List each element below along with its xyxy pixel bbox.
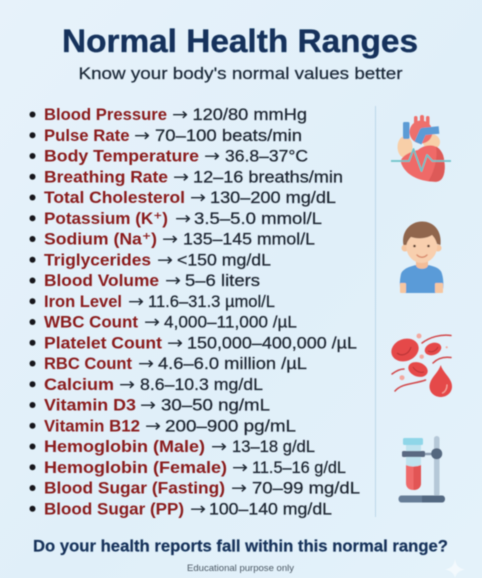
row: triglycerides: Triglycerides <box>44 250 151 269</box>
row: hemoglobin male <box>30 437 315 457</box>
row: hemoglobin male: → <box>211 437 227 457</box>
row: sodium: → <box>162 230 178 250</box>
row: vitamin b12: Vitamin B12 <box>44 416 140 435</box>
row: body temperature: 36.8–37°C <box>225 146 308 166</box>
row: blood sugar pp: → <box>190 499 206 519</box>
row: total cholesterol: 130–200 mg/dL <box>210 188 336 207</box>
row: platelet count <box>30 333 357 353</box>
row: triglycerides <box>30 250 271 270</box>
row: potassium <box>30 209 322 229</box>
row: sodium: Sodium (Na⁺) <box>44 230 157 248</box>
row: vitamin d3: 30–50 ng/mL <box>161 396 270 414</box>
row: breathing rate: 12–16 breaths/min <box>193 167 343 186</box>
row: blood sugar fasting: Blood Sugar (Fasting) <box>44 478 225 498</box>
icon: boy <box>400 222 443 293</box>
closing question: Do your health reports fall within this normal range? <box>33 538 448 556</box>
sparkle <box>445 559 465 578</box>
row: potassium: → <box>175 209 191 229</box>
row: wbc count: 4,000–11,000 /µL <box>164 312 297 332</box>
row: rbc count: RBC Count <box>44 354 132 373</box>
row: body temperature: → <box>204 146 220 166</box>
row: platelet count: → <box>167 333 183 353</box>
row: pulse rate: Pulse Rate <box>44 126 130 145</box>
row: iron level: 11.6–31.3 µmol/L <box>148 292 275 311</box>
row: hemoglobin female <box>30 458 346 478</box>
row: blood pressure: 120/80 mmHg <box>192 105 307 124</box>
row: iron level: → <box>128 292 144 312</box>
row: wbc count <box>30 312 297 332</box>
row: blood sugar fasting: → <box>231 478 247 498</box>
icon: heart <box>391 115 451 182</box>
row: breathing rate <box>30 167 343 187</box>
row: total cholesterol: Total Cholesterol <box>44 188 185 207</box>
row: rbc count: → <box>138 354 154 374</box>
row: platelet count: 150,000–400,000 /µL <box>187 333 357 352</box>
row: hemoglobin female: 11.5–16 g/dL <box>252 458 346 477</box>
row: calcium: 8.6–10.3 mg/dL <box>140 375 263 394</box>
row: potassium: Potassium (K⁺) <box>44 209 168 228</box>
row: hemoglobin female: Hemoglobin (Female) <box>44 458 227 477</box>
subtitle: Know your body's normal values better <box>78 64 403 83</box>
icon: test tube on stand <box>398 436 445 502</box>
row: vitamin d3: Vitamin D3 <box>44 396 136 414</box>
row: body temperature: Body Temperature <box>44 146 199 166</box>
list of normal ranges <box>30 105 360 519</box>
title: Normal Health Ranges <box>62 23 418 59</box>
row: calcium: → <box>119 375 135 395</box>
row: calcium <box>30 375 263 395</box>
row: vitamin d3: → <box>140 396 156 416</box>
row: body temperature <box>30 146 308 166</box>
row: sodium: 135–145 mmol/L <box>183 230 315 248</box>
row: vitamin b12 <box>30 416 296 436</box>
row: blood sugar fasting: 70–99 mg/dL <box>252 478 360 498</box>
row: blood volume: → <box>165 271 181 291</box>
row: hemoglobin female: → <box>232 458 248 478</box>
row: blood pressure: → <box>172 105 188 125</box>
row: rbc count <box>30 354 307 374</box>
row: blood pressure: Blood Pressure <box>44 105 167 124</box>
row: iron level <box>30 292 275 312</box>
row: triglycerides: → <box>157 250 173 270</box>
row: blood sugar pp: 100–140 mg/dL <box>209 499 332 518</box>
row: blood sugar fasting <box>30 478 360 498</box>
row: vitamin b12: 200–900 pg/mL <box>165 416 296 435</box>
row: potassium: 3.5–5.0 mmol/L <box>194 209 322 228</box>
row: blood sugar pp: Blood Sugar (PP) <box>44 499 184 518</box>
row: vitamin b12: → <box>145 416 161 436</box>
row: total cholesterol <box>30 188 336 208</box>
row: iron level: Iron Level <box>44 292 122 311</box>
row: rbc count: 4.6–6.0 million /µL <box>158 354 307 373</box>
icon: blood cells <box>388 334 452 397</box>
row: wbc count: → <box>144 312 160 332</box>
row: pulse rate: 70–100 beats/min <box>155 126 302 145</box>
row: triglycerides: <150 mg/dL <box>177 250 271 269</box>
row: pulse rate <box>30 126 302 146</box>
row: hemoglobin male: 13–18 g/dL <box>232 437 315 456</box>
row: blood volume <box>30 271 260 291</box>
row: vitamin d3 <box>30 396 270 416</box>
row: blood volume: 5–6 liters <box>185 271 260 290</box>
row: blood sugar pp <box>30 499 332 519</box>
row: platelet count: Platelet Count <box>44 333 162 352</box>
row: breathing rate: Breathing Rate <box>44 167 168 186</box>
row: blood volume: Blood Volume <box>44 271 159 290</box>
row: pulse rate: → <box>134 126 150 146</box>
row: total cholesterol: → <box>190 188 206 208</box>
disclaimer: Educational purpose only <box>187 563 294 574</box>
row: hemoglobin male: Hemoglobin (Male) <box>44 437 205 456</box>
row: calcium: Calcium <box>44 375 114 394</box>
row: wbc count: WBC Count <box>44 312 138 332</box>
row: breathing rate: → <box>173 167 189 187</box>
row: sodium <box>30 230 315 250</box>
row: blood pressure <box>30 105 307 125</box>
